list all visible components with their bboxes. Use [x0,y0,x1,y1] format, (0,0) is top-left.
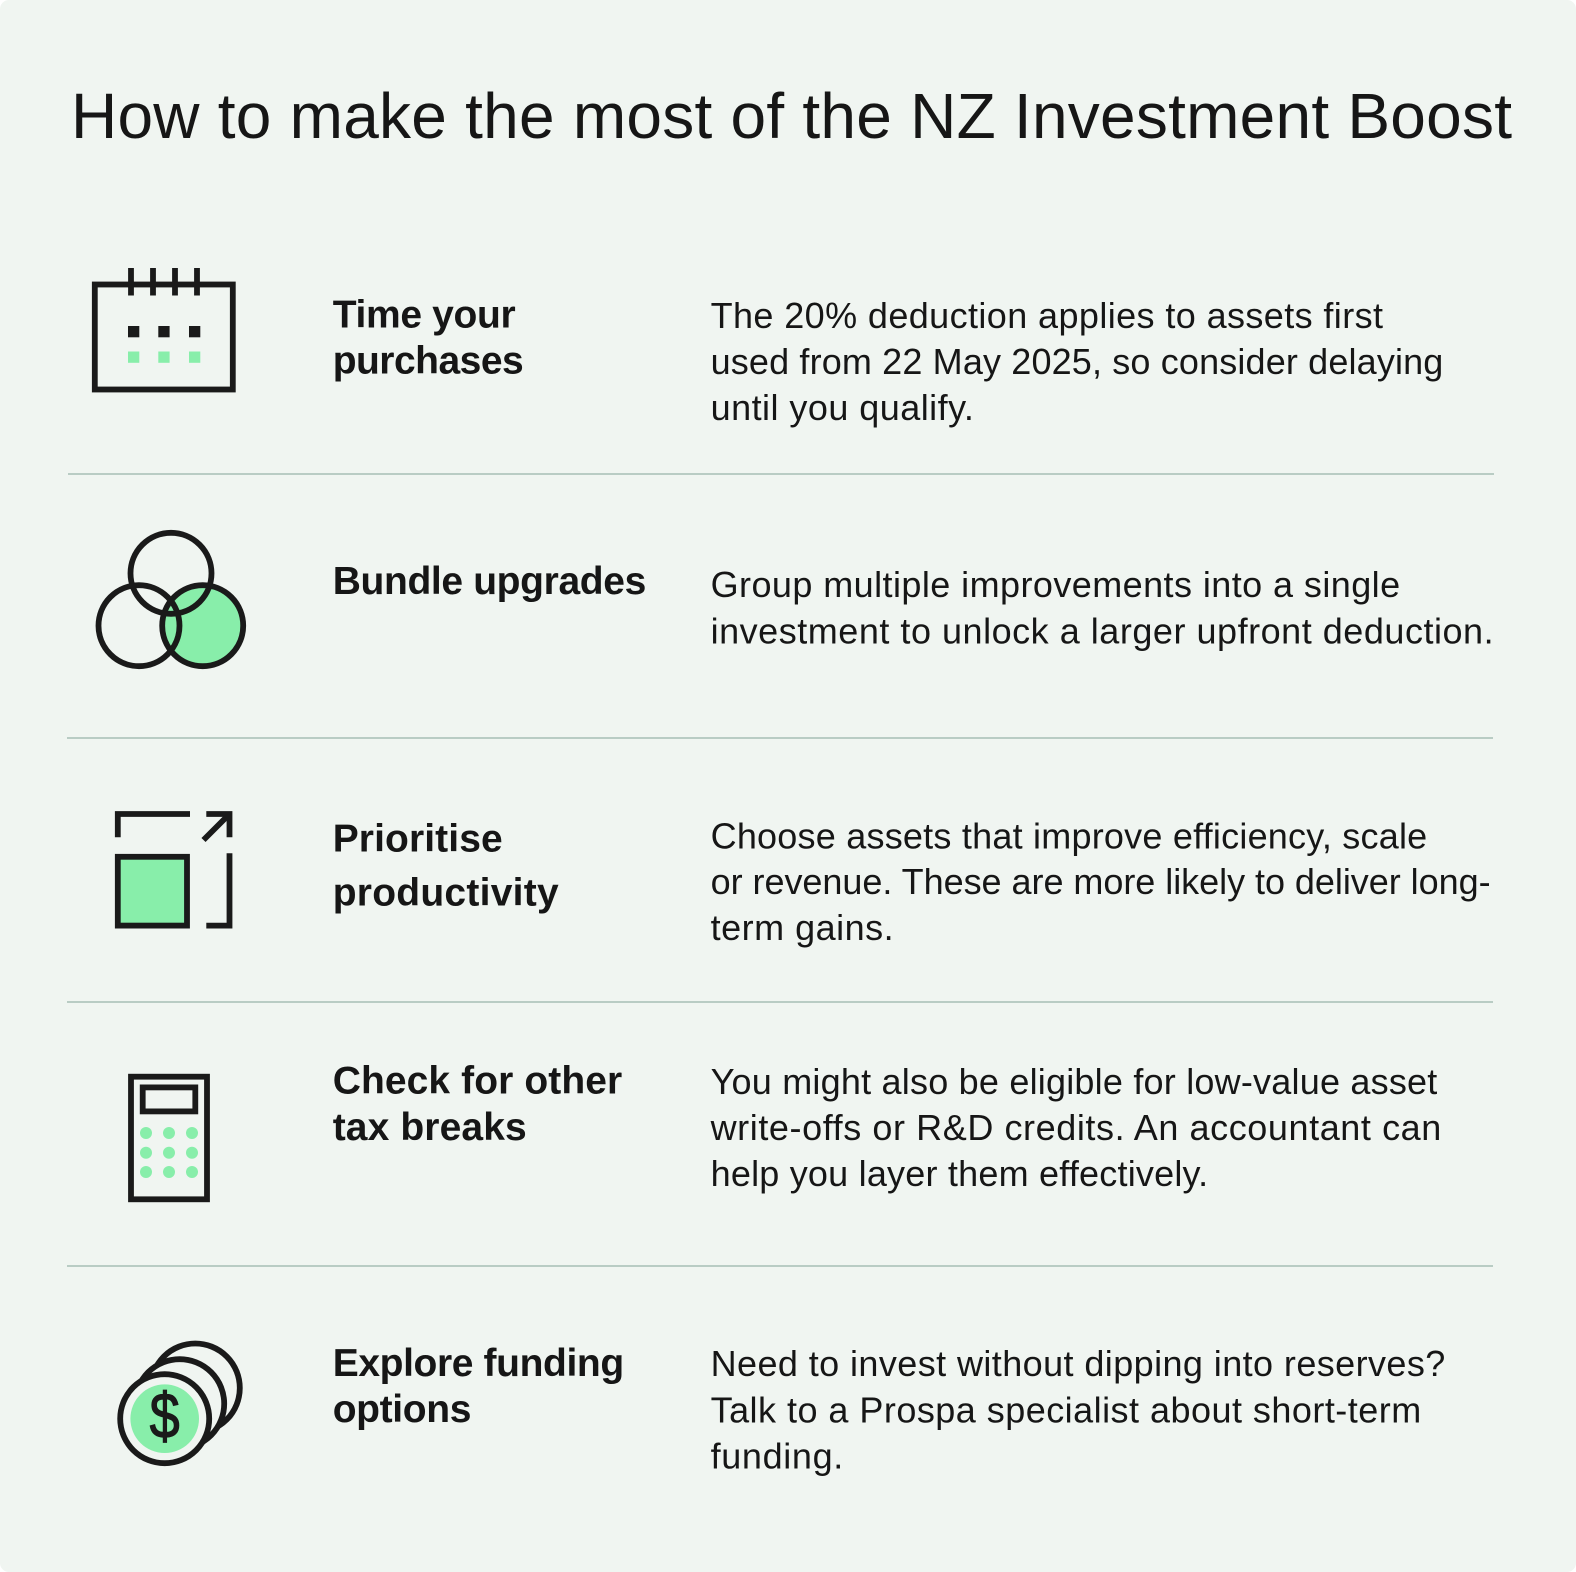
heading: time your purchases: Time your [333,294,516,337]
title: How to make the most of the NZ Investment Boost [71,80,1512,152]
row: bundle upgrades [98,533,1494,666]
heading: time your purchases: purchases [333,340,524,383]
text: time your purchases: used from 22 May 2025, so consider delaying [711,341,1443,382]
text: prioritise productivity [711,815,1491,948]
text: bundle upgrades: Group multiple improvements into a single [711,564,1400,605]
text: explore funding options: Need to invest without dipping into reserves? [711,1343,1445,1384]
heading: explore funding options: Explore funding [333,1342,624,1385]
text: time your purchases: The 20% deduction applies to assets first [711,295,1383,336]
heading: check for other tax breaks: tax breaks [333,1106,527,1149]
heading: prioritise productivity: Prioritise [333,817,503,860]
icon: scale up square [118,814,230,926]
heading: bundle upgrades: Bundle upgrades [333,560,646,603]
text: bundle upgrades: investment to unlock a larger upfront deduction. [711,610,1494,651]
text: prioritise productivity: Choose assets that improve efficiency, scale [711,815,1427,856]
text: time your purchases: until you qualify. [711,387,974,428]
text: check for other tax breaks: help you layer them effectively. [711,1153,1208,1194]
icon: coins [120,1344,240,1463]
icon: calendar [95,268,233,390]
heading: check for other tax breaks: Check for other [333,1060,622,1102]
icon: coins: $ [150,1381,180,1452]
heading: check for other tax breaks [333,1060,622,1149]
heading: explore funding options: options [333,1388,471,1431]
row: explore funding options [120,1342,1445,1476]
text: explore funding options: funding. [711,1435,843,1476]
text: check for other tax breaks [710,1061,1441,1194]
heading: prioritise productivity: productivity [333,872,559,915]
heading: explore funding options [333,1342,624,1431]
text: prioritise productivity: term gains. [711,907,894,948]
heading: prioritise productivity [333,817,559,915]
text: prioritise productivity: or revenue. These are more likely to deliver long- [711,861,1491,902]
text: check for other tax breaks: write-offs or R&D credits. An accountant can [710,1107,1441,1148]
heading: time your purchases [333,294,524,383]
row: check for other tax breaks [131,1060,1441,1199]
icon: overlapping circles [98,533,243,666]
text: time your purchases [711,295,1443,428]
text: bundle upgrades [711,564,1494,651]
text: explore funding options [711,1343,1445,1476]
icon: calculator [131,1077,207,1199]
text: check for other tax breaks: You might also be eligible for low-value asset [711,1061,1437,1102]
row: prioritise productivity [118,814,1491,948]
row: time your purchases [95,268,1443,428]
text: explore funding options: Talk to a Prospa specialist about short-term [711,1390,1421,1430]
